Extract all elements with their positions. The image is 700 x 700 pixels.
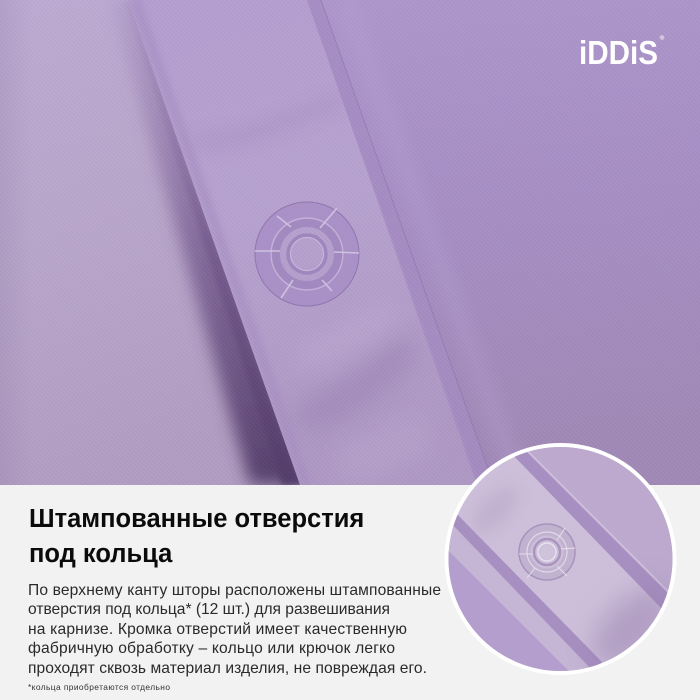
body text: По верхнему канту шторы расположены штампованные — [28, 582, 441, 599]
fold highlight right — [345, 0, 520, 485]
body text: на карнизе. Кромка отверстий имеет качественную — [28, 621, 407, 638]
detail: pale lower strip — [448, 524, 595, 671]
weave texture — [0, 0, 700, 485]
curtain right panel — [128, 0, 700, 485]
hem seam strip — [307, 0, 494, 485]
detail: hem background — [448, 447, 672, 671]
body text: фабричную обработку – кольцо или крючок легко — [28, 640, 395, 657]
detail: dark seam lower — [448, 512, 602, 672]
detail: stamped ring — [519, 524, 575, 580]
curtain left panel — [0, 0, 320, 485]
detail: dark seam upper — [514, 452, 668, 608]
detail: lower left fabric — [448, 550, 569, 671]
detail: hem shadow upper — [475, 490, 515, 530]
hem band — [156, 2, 475, 485]
callout: zoomed detail circle — [444, 443, 676, 675]
hem seam line — [321, 0, 494, 485]
body text: проходят сквозь материал изделия, не повреждая его. — [28, 660, 427, 677]
panel: curtain photo — [0, 0, 700, 485]
detail: upper right fabric — [530, 447, 672, 590]
logo: iDDIS: iDDiS — [579, 34, 658, 71]
body text: отверстия под кольца* (12 шт.) для развешивания — [28, 601, 390, 618]
heading: под кольца — [29, 540, 173, 568]
body text — [28, 582, 441, 677]
footnote: *кольца приобретаются отдельно — [28, 682, 170, 692]
detail: hem shadow — [585, 582, 668, 664]
heading: Штампованные отверстия — [29, 505, 364, 533]
panel: text background — [0, 485, 700, 700]
icon: stamped ring hole — [255, 202, 359, 306]
